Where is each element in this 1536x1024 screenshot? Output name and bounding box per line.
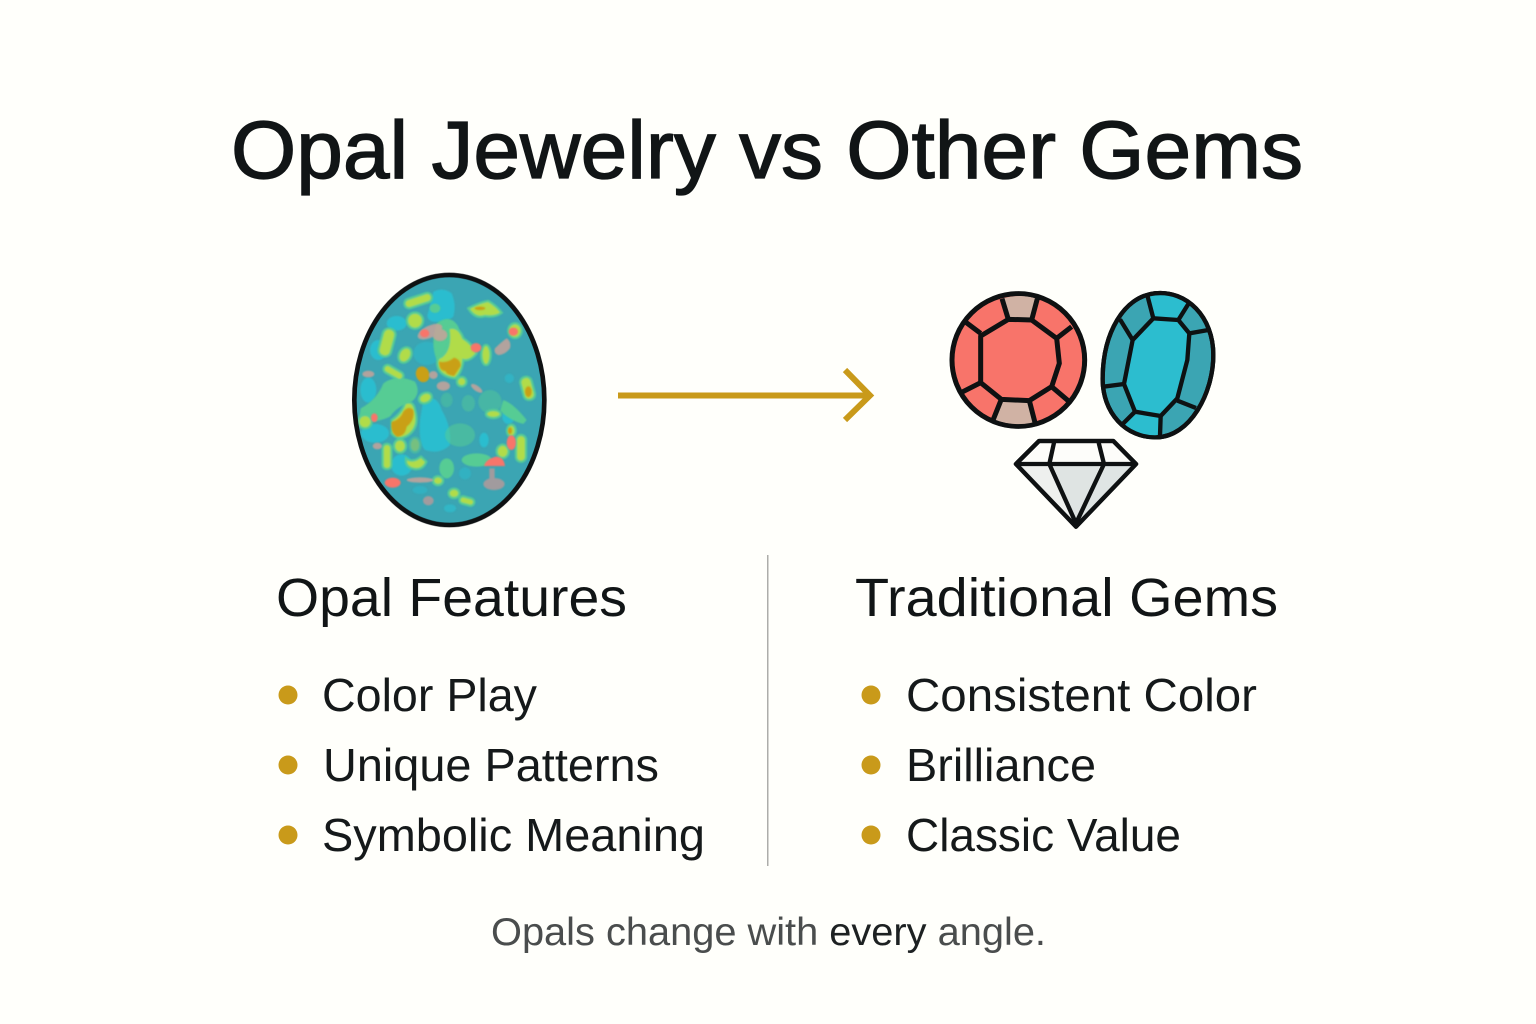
heading: opal features: Opal Features (276, 568, 627, 628)
icon: traditional gems (952, 293, 1213, 527)
bullet item: consistent color: Consistent Color (906, 669, 1257, 721)
icon: teal oval gem (1103, 293, 1213, 437)
icon: red round gem (952, 294, 1085, 426)
caption: Opals change with every angle. (491, 911, 1046, 954)
icon: opal gem (354, 275, 544, 525)
bullet item: classic value: Classic Value (906, 809, 1181, 861)
icon: white diamond (1016, 441, 1136, 527)
bullet item: color play: Color Play (322, 669, 537, 721)
bullet item: unique patterns: Unique Patterns (323, 739, 659, 791)
heading: traditional gems: Traditional Gems (855, 568, 1278, 628)
bullet item: brilliance: Brilliance (906, 739, 1096, 791)
divider (767, 555, 768, 866)
infographic canvas (234, 118, 1301, 953)
bullet item: symbolic meaning: Symbolic Meaning (322, 809, 705, 861)
list: traditional gems (862, 669, 1257, 861)
list: opal features (278, 669, 705, 861)
arrow (618, 370, 870, 420)
title: Opal Jewelry vs Other Gems (231, 105, 1303, 196)
